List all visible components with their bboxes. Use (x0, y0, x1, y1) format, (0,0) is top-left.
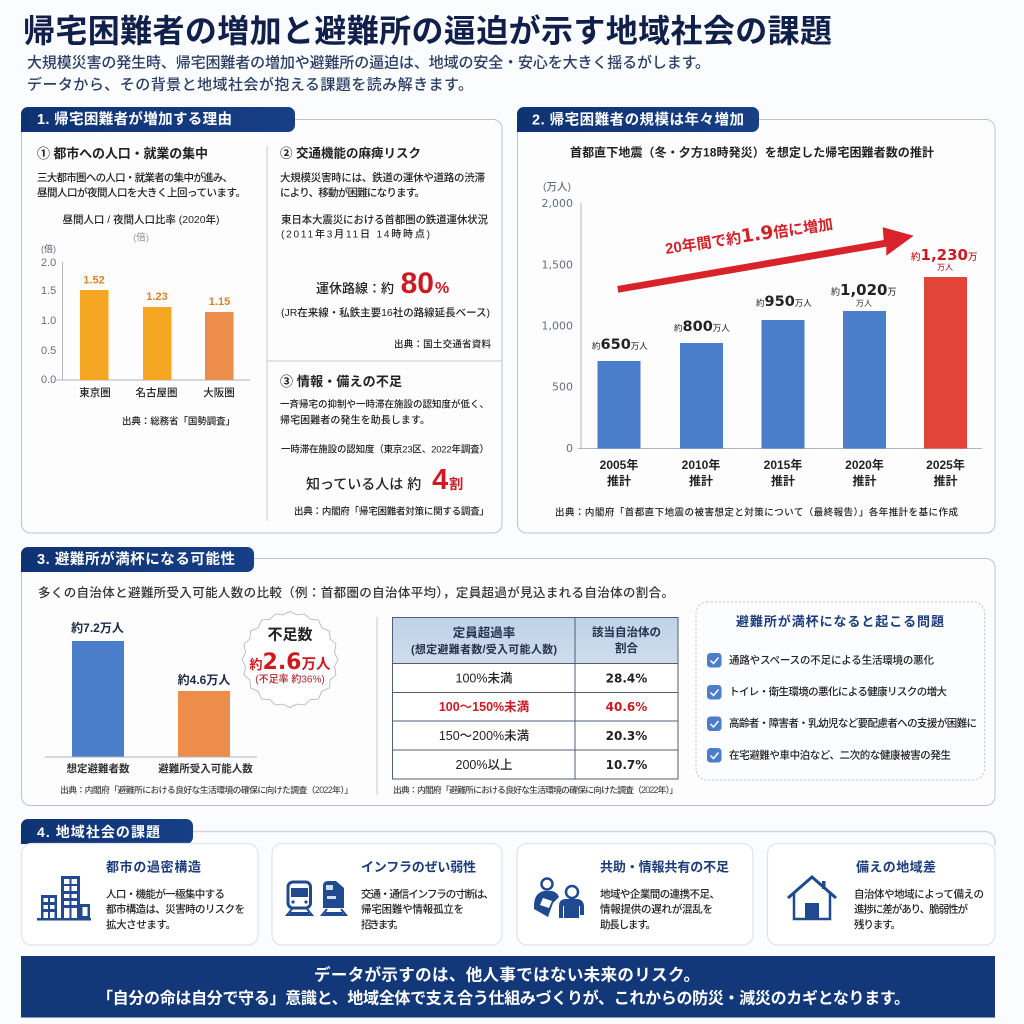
sub-panel: lack of information (280, 374, 489, 518)
bar chart: day/night population ratio (41, 213, 250, 428)
icon: trains (287, 881, 346, 915)
stat: awareness: 知っている人は 約 4割 (306, 464, 463, 496)
icon: check 1 (707, 653, 722, 668)
card: urban density: 人口・機能が一極集中する (106, 888, 225, 900)
banner: closing message (21, 956, 995, 1018)
panel: problems list: 在宅避難や車中泊など、二次的な健康被害の発生 (729, 748, 951, 762)
bar chart: day/night population ratio: 0.5 (41, 345, 56, 357)
bar chart: day/night population ratio: 1.0 (41, 315, 56, 327)
panel: 2 growth chart (517, 107, 995, 533)
stat: suspended lines: 運休路線：約 80% (316, 267, 449, 300)
icon: check 2 (707, 685, 722, 700)
callout: shortfall burst: 約2.6万人 (250, 650, 331, 675)
bar chart: estimated stranded commuters: 1,500 (542, 258, 573, 272)
card: regional gaps: 残ります。 (854, 918, 901, 931)
sub-panel: population concentration: 昼間人口が夜間人口を大きく上回っています。 (37, 186, 246, 199)
panel: 1 reasons (21, 107, 502, 533)
table: over-capacity rates: 28.4% (606, 672, 647, 686)
banner: closing message: データが示すのは、他人事ではない未来のリスク。 (314, 964, 700, 984)
sub-panel: transport paralysis: 大規模災害時には、鉄道の運休や道路の渋滞 (280, 171, 486, 184)
card: fragile infrastructure: 交通・通信インフラの寸断は、 (361, 888, 494, 900)
bar chart: day/night population ratio: 1.52 (83, 274, 105, 286)
bar chart: estimated stranded commuters: 2,000 (542, 197, 573, 210)
section heading 1: 1. 帰宅困難者が増加する理由 (37, 110, 232, 128)
card: fragile infrastructure: 招きます。 (361, 918, 404, 931)
card: urban density: 都市構造は、災害時のリスクを (106, 902, 245, 916)
panel: problems list: トイレ・衛生環境の悪化による健康リスクの増大 (729, 685, 948, 698)
sub-panel: lack of information: ③ 情報・備えの不足 (280, 374, 402, 389)
card: mutual aid (517, 844, 753, 945)
x-axis labels: 2005年 (600, 457, 638, 472)
arrow label: 20年間で約1.9倍に増加 (664, 213, 834, 259)
table: over-capacity rates: 該当自治体の (592, 625, 661, 639)
sub-panel: population concentration: ① 都市への人口・就業の集中 (37, 146, 208, 161)
section heading 4: 4. 地域社会の課題 (37, 824, 160, 840)
bar chart: estimated stranded commuters (542, 181, 982, 488)
icon: check 3 (707, 716, 722, 731)
bar chart: day/night population ratio: 昼間人口 / 夜間人口比率 (2020年) (62, 213, 220, 226)
sub-panel: transport paralysis: により、移動が困難になります。 (280, 186, 425, 199)
bar chart: evacuees vs capacity: 避難所受入可能人数 (158, 762, 253, 775)
icon: buildings (37, 876, 91, 920)
table: over-capacity rates: 200%以上 (456, 758, 512, 772)
sub-panel: transport paralysis: ② 交通機能の麻痺リスク (280, 146, 421, 160)
intro text: データから、その背景と地域社会が抱える課題を読み解きます。 (27, 76, 473, 94)
bar chart: day/night population ratio: 1.15 (209, 296, 230, 308)
x-axis labels: 2025年 (926, 457, 965, 472)
bar chart: day/night population ratio: (倍) (41, 243, 56, 254)
banner: closing message: 「自分の命は自分で守る」意識と、地域全体で支え合う仕組みづくりが、これからの防災・減災のカギとなります。 (97, 988, 910, 1008)
table: over-capacity rates: 定員超過率 (453, 625, 515, 640)
bar chart: day/night population ratio: 1.23 (146, 291, 168, 303)
section heading 4 (21, 819, 193, 844)
table: over-capacity rates (392, 618, 678, 795)
card: urban density: 拡大させます。 (106, 918, 176, 931)
value labels: 約1,020万 (831, 281, 896, 299)
value labels: 約1,230万 (911, 246, 977, 264)
panel: 3 shelters (21, 547, 995, 806)
card: fragile infrastructure: 帰宅困難や情報孤立を (361, 902, 464, 916)
bar chart: estimated stranded commuters: 1,000 (542, 320, 573, 332)
section lead text: 多くの自治体と避難所受入可能人数の比較（例：首都圏の自治体平均），定員超過が見込まれる自治体の割合。 (38, 585, 674, 600)
value labels: 万人 (937, 263, 953, 272)
arrow: growth trend (617, 227, 914, 293)
table: over-capacity rates: 100〜150%未満 (439, 699, 530, 714)
panel: problems list: 避難所が満杯になると起こる問題 (736, 614, 944, 629)
bar chart: evacuees vs capacity: 出典：内閣府「避難所における良好な生活環境の確保に向けた調査（2022年）」 (60, 784, 353, 795)
x-axis labels: 推計 (607, 473, 631, 488)
card: regional gaps (768, 844, 995, 945)
card: fragile infrastructure (272, 844, 502, 945)
bar chart: evacuees vs capacity (45, 620, 353, 795)
panel: 4 regional issues (21, 819, 995, 945)
callout: shortfall burst: 不足数 (267, 626, 313, 644)
table: over-capacity rates: (想定避難者数/受入可能人数) (411, 642, 557, 656)
callout: shortfall burst (242, 612, 338, 708)
table: over-capacity rates: 出典：内閣府「避難所における良好な生活環境の確保に向けた調査（2022年）」 (393, 784, 678, 795)
icon: house (788, 877, 836, 919)
panel: problems list: 通路やスペースの不足による生活環境の悪化 (729, 654, 934, 666)
bar chart: day/night population ratio: (倍) (133, 232, 149, 244)
table: over-capacity rates: 100%未満 (456, 670, 512, 686)
sub-panel: transport paralysis: (JR在来線・私鉄主要16社の路線延長ベース) (281, 306, 490, 319)
title: 帰宅困難者の増加と避難所の逼迫が示す地域社会の課題 (23, 13, 832, 49)
sub-panel: population concentration: 三大都市圏への人口・就業者の集中が進み、 (37, 171, 233, 184)
chart title: 首都直下地震（冬・夕方18時発災）を想定した帰宅困難者数の推計 (570, 144, 934, 160)
bar chart: day/night population ratio: 名古屋圏 (136, 386, 178, 399)
table: over-capacity rates: 40.6% (606, 700, 647, 714)
sub-panel: lack of information: 一時滞在施設の認知度（東京23区、2022年調査） (281, 444, 489, 456)
card: urban density: 都市の過密構造 (106, 860, 201, 874)
sub-panel: lack of information: 一斉帰宅の抑制や一時滞在施設の認知度が低く、 (280, 398, 489, 410)
x-axis labels: 推計 (852, 473, 877, 488)
bar chart: estimated stranded commuters: 500 (552, 380, 573, 394)
card: mutual aid: 助長します。 (600, 918, 656, 931)
bar chart: evacuees vs capacity: 想定避難者数 (66, 762, 130, 775)
x-axis labels: 2020年 (845, 457, 884, 472)
panel: problems list: 高齢者・障害者・乳幼児など要配慮者への支援が困難に (729, 716, 977, 730)
icon: people (534, 878, 584, 918)
bar chart: day/night population ratio: 出典：総務省「国勢調査」 (122, 416, 235, 428)
section heading 2 (517, 107, 759, 132)
bar chart: day/night population ratio: 1.5 (41, 285, 56, 297)
x-axis labels: 推計 (771, 473, 795, 488)
value labels (592, 246, 977, 353)
card: regional gaps: 備えの地域差 (856, 860, 936, 874)
table: over-capacity rates: 150〜200%未満 (439, 728, 529, 743)
bar chart: evacuees vs capacity: 約7.2万人 (71, 620, 124, 635)
sub-panel: transport paralysis: (2011年3月11日 14時時点) (281, 228, 430, 240)
bar chart: day/night population ratio: 2.0 (41, 257, 56, 269)
bar chart: evacuees vs capacity: 約4.6万人 (178, 672, 230, 687)
x-axis labels: 2015年 (764, 457, 802, 472)
card: regional gaps: 進捗に差があり、脆弱性が (854, 902, 968, 916)
value labels: 約650万人 (592, 337, 648, 353)
sub-panel: transport paralysis (280, 146, 491, 350)
bar chart: day/night population ratio: 0.0 (41, 374, 56, 386)
card: urban density (22, 844, 258, 945)
value labels: 万人 (856, 299, 872, 308)
icon: check 4 (707, 748, 722, 762)
x-axis labels: 推計 (933, 473, 958, 488)
table: over-capacity rates: 割合 (615, 641, 638, 655)
table: over-capacity rates: 10.7% (606, 758, 647, 772)
card: mutual aid: 情報提供の遅れが混乱を (600, 902, 713, 916)
panel: problems list (696, 602, 984, 780)
bar chart: estimated stranded commuters: (万人) (543, 181, 571, 193)
card: regional gaps: 自治体や地域によって備えの (854, 888, 984, 900)
section heading 1 (21, 107, 295, 132)
x-axis labels: 2010年 (682, 457, 720, 472)
card: mutual aid: 地域や企業間の連携不足、 (600, 888, 720, 900)
value labels: 約950万人 (756, 294, 812, 310)
sub-panel: lack of information: 出典：内閣府「帰宅困難者対策に関する調査」 (294, 506, 489, 518)
bar chart: day/night population ratio: 東京圏 (79, 386, 111, 399)
sub-panel: transport paralysis: 出典：国土交通省資料 (394, 338, 491, 350)
bar chart: estimated stranded commuters: 0 (566, 442, 573, 455)
section heading 2: 2. 帰宅困難者の規模は年々増加 (532, 110, 744, 128)
bar chart: day/night population ratio: 大阪圏 (203, 386, 235, 399)
section heading 3: 3. 避難所が満杯になる可能性 (37, 550, 235, 568)
card: fragile infrastructure: インフラのぜい弱性 (361, 860, 476, 874)
table: over-capacity rates: 20.3% (606, 729, 647, 743)
source note: 出典：内閣府「首都直下地震の被害想定と対策について（最終報告）」各年推計を基に作成 (555, 506, 958, 518)
sub-panel: transport paralysis: 東日本大震災における首都圏の鉄道運休状況 (281, 213, 488, 226)
section heading 3 (21, 547, 254, 572)
sub-panel: lack of information: 帰宅困難者の発生を助長します。 (280, 414, 430, 426)
callout: shortfall burst: (不足率 約36%) (255, 672, 325, 686)
x-axis labels: 推計 (689, 473, 713, 488)
intro text: 大規模災害の発生時、帰宅困難者の増加や避難所の逼迫は、地域の安全・安心を大きく揺るがします。 (27, 54, 710, 72)
x-axis labels (600, 457, 965, 488)
intro text (27, 54, 710, 94)
card: mutual aid: 共助・情報共有の不足 (600, 860, 729, 874)
value labels: 約800万人 (674, 319, 730, 335)
sub-panel: population concentration (37, 146, 250, 428)
